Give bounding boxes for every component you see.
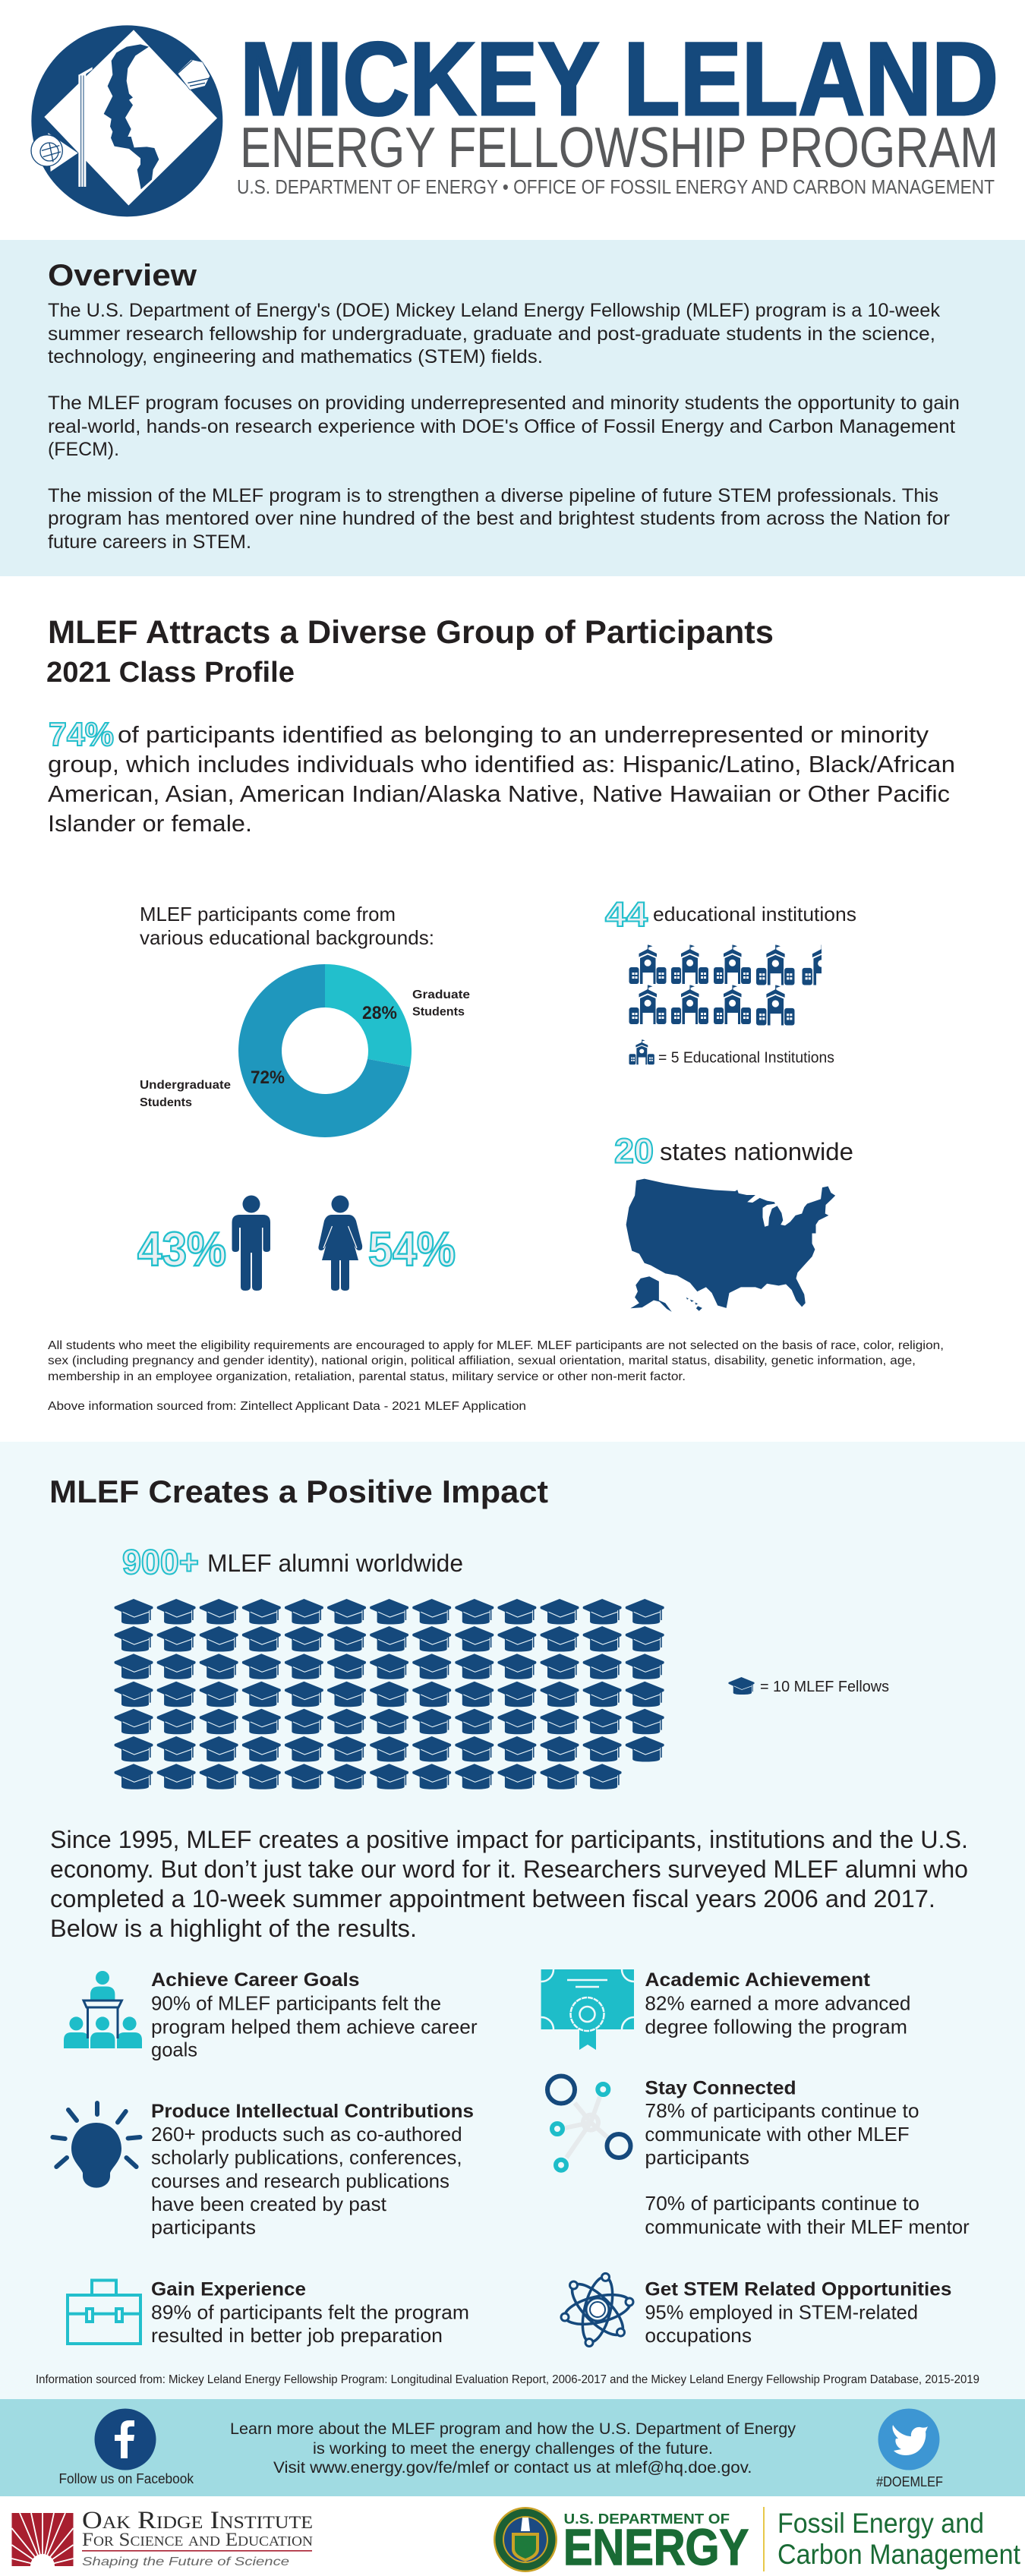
text: follow on Facebook: Follow us on Facebook <box>59 2471 194 2486</box>
item: gain experience: 89% of participants felt the program <box>151 2300 469 2323</box>
panel: overview <box>0 240 1025 576</box>
label: graduate students: Students <box>412 1005 465 1019</box>
item: achieve career goals: Achieve Career Goals <box>151 1969 360 1991</box>
icon: Twitter <box>878 2408 940 2470</box>
icon: briefcase <box>68 2281 140 2344</box>
text block: overview paragraphs <box>48 300 960 553</box>
item: gain experience: Gain Experience <box>151 2279 306 2300</box>
legend: school scale <box>629 1039 834 1066</box>
stat: 20 states: 20 <box>614 1131 654 1171</box>
icon: certificate <box>541 1969 634 2050</box>
stat: 43 percent men: 43% <box>137 1223 226 1276</box>
icon: light bulb <box>52 2103 140 2188</box>
item: achieve career goals <box>151 1969 478 2060</box>
text block: overview paragraphs: The MLEF program focuses on providing underrepresented and minority students the opportunity to gain <box>48 393 960 414</box>
text: states nationwide: states nationwide <box>660 1138 853 1165</box>
header <box>31 21 998 216</box>
text: tagline: Shaping the Future of Science <box>82 2556 289 2568</box>
heading: 2021 class profile: 2021 Class Profile <box>46 657 295 689</box>
item: intellectual contributions: 260+ products such as co-authored <box>151 2123 462 2146</box>
icon: presenter and audience <box>64 1971 142 2048</box>
text block: overview paragraphs: real-world, hands-on research experience with DOE's Office of Fossil Energy and Carbon Management <box>48 416 955 437</box>
heading: Overview: Overview <box>48 259 197 292</box>
item: stay connected: 70% of participants continue to <box>645 2192 919 2215</box>
icon: DOE seal <box>494 2507 557 2572</box>
item: stay connected: communicate with other MLEF <box>645 2123 910 2146</box>
text block: overview paragraphs: technology, engineering and mathematics (STEM) fields. <box>48 346 543 367</box>
item: academic achievement: 82% earned a more advanced <box>645 1992 910 2015</box>
text block: impact intro: Below is a highlight of the results. <box>50 1915 417 1942</box>
item: gain experience <box>151 2279 469 2347</box>
text block: overview paragraphs: program has mentored over nine hundred of the best and brightest students from across the Nation for <box>48 508 950 529</box>
item: intellectual contributions: have been created by past <box>151 2193 387 2215</box>
text: MLEF alumni worldwide: MLEF alumni worldwide <box>207 1550 463 1577</box>
text: educational institutions: educational institutions <box>653 903 856 925</box>
text block: impact intro <box>50 1826 968 1942</box>
text block: learn more: Visit www.energy.gov/fe/mlef or contact us at mlef@hq.doe.gov. <box>273 2459 752 2477</box>
item: intellectual contributions: Produce Intellectual Contributions <box>151 2101 474 2122</box>
panel: contact band <box>0 2399 1025 2496</box>
text block: eligibility statement: membership in an employee organization, retaliation, parental status, military service or other non-merit factor. <box>48 1370 686 1383</box>
label: graduate students: Graduate <box>412 988 470 1001</box>
stat: 900 plus: 900+ <box>122 1543 199 1581</box>
icon: Facebook <box>94 2408 156 2470</box>
chart: donut of student levels <box>140 964 470 1137</box>
text: hashtag: #DOEMLEF <box>876 2474 943 2489</box>
text: for science and education: For Science and Education <box>82 2530 313 2550</box>
item: STEM opportunities: Get STEM Related Opportunities <box>645 2279 951 2300</box>
text block: impact intro: economy. But don’t just take our word for it. Researchers surveyed MLEF alumni who <box>50 1856 968 1883</box>
item: STEM opportunities: occupations <box>645 2324 752 2347</box>
text: impact source note: Information sourced from: Mickey Leland Energy Fellowship Program: Longitudinal Evaluation Report, 2006-2017 and the Mickey Leland Energy Fellowship Program Database, 2015-2019 <box>36 2373 979 2386</box>
text block: underrepresented groups: group, which includes individuals who identified as: Hispanic/Latino, Black/African <box>48 751 955 777</box>
text block: overview paragraphs: The U.S. Department of Energy's (DOE) Mickey Leland Energy Fellowship (MLEF) program is a 10-week <box>48 300 940 321</box>
panel: positive impact <box>0 1442 1025 2399</box>
text block: eligibility statement <box>48 1339 944 1413</box>
map: United States <box>626 1179 835 1312</box>
stat: 54 percent women: 54% <box>368 1223 456 1276</box>
text: Energy: ENERGY <box>563 2519 749 2576</box>
icon: atom <box>561 2273 633 2346</box>
text block: learn more: is working to meet the energy challenges of the future. <box>313 2440 713 2458</box>
icon grid: schools <box>629 944 840 1026</box>
text block: overview paragraphs: (FECM). <box>48 439 119 460</box>
icon: woman <box>318 1195 362 1291</box>
logo: Oak Ridge Institute <box>12 2507 313 2568</box>
text: educational backgrounds intro: MLEF participants come from <box>140 903 396 925</box>
text: Fossil Energy and Carbon Management: Fossil Energy and <box>777 2508 984 2539</box>
icon: MLEF logo <box>31 25 222 216</box>
item: intellectual contributions: participants <box>151 2216 256 2239</box>
item: achieve career goals: program helped them achieve career <box>151 2015 478 2038</box>
text block: eligibility statement: All students who meet the eligibility requirements are encouraged to apply for MLEF. MLEF participants are not selected on the basis of race, color, religion, <box>48 1339 944 1352</box>
item: stay connected <box>645 2078 970 2238</box>
text block: impact intro: Since 1995, MLEF creates a positive impact for participants, institutions and the U.S. <box>50 1826 968 1853</box>
item: STEM opportunities <box>645 2279 951 2347</box>
legend: school scale: = 5 Educational Institutions <box>658 1049 834 1066</box>
item: STEM opportunities: 95% employed in STEM-related <box>645 2300 918 2323</box>
logo: Department of Energy <box>494 2507 1021 2576</box>
item: stay connected: communicate with their MLEF mentor <box>645 2215 970 2238</box>
text: educational backgrounds intro: various educational backgrounds: <box>140 926 434 949</box>
item: intellectual contributions: scholarly publications, conferences, <box>151 2146 462 2169</box>
panel: diverse group of participants <box>46 614 955 1413</box>
value: 72 percent: 72% <box>251 1067 285 1088</box>
item: stay connected: participants <box>645 2146 749 2169</box>
icon: ORISE sunburst <box>12 2513 73 2566</box>
item: academic achievement: Academic Achievement <box>645 1969 871 1991</box>
text block: underrepresented groups: of participants identified as belonging to an underrepresented or minority <box>118 721 929 748</box>
label: graduate students <box>412 988 470 1019</box>
text block: overview paragraphs: future careers in STEM. <box>48 531 251 553</box>
item: achieve career goals: goals <box>151 2038 197 2060</box>
value: 28 percent: 28% <box>362 1003 397 1023</box>
label: undergraduate students: Students <box>140 1096 192 1109</box>
text: Oak Ridge Institute: Oak Ridge Institute <box>82 2507 313 2534</box>
item: academic achievement <box>645 1969 910 2038</box>
text block: learn more: Learn more about the MLEF program and how the U.S. Department of Energy <box>230 2420 796 2438</box>
icon: man <box>232 1195 270 1291</box>
item: intellectual contributions: courses and research publications <box>151 2170 449 2193</box>
icon: network <box>547 2076 630 2171</box>
text block: underrepresented groups <box>48 721 955 837</box>
text block: eligibility statement: Above information sourced from: Zintellect Applicant Data - 2021 MLEF Application <box>48 1400 526 1413</box>
label: undergraduate students <box>140 1079 231 1109</box>
icon grid: graduation caps <box>114 1599 664 1789</box>
text: Fossil Energy and Carbon Management <box>777 2508 1021 2570</box>
text block: overview paragraphs: summer research fellowship for undergraduate, graduate and post-graduate students in the science, <box>48 323 935 345</box>
item: academic achievement: degree following the program <box>645 2015 907 2038</box>
item: gain experience: resulted in better job preparation <box>151 2324 443 2347</box>
text block: underrepresented groups: American, Asian, American Indian/Alaska Native, Native Hawaiian or Other Pacific <box>48 780 950 807</box>
heading: MLEF attracts a diverse group: MLEF Attracts a Diverse Group of Participants <box>48 614 774 651</box>
stat: 74 percent: 74% <box>49 716 114 753</box>
text block: impact intro: completed a 10-week summer appointment between fiscal years 2006 and 2017. <box>50 1885 935 1912</box>
text block: underrepresented groups: Islander or female. <box>48 810 252 837</box>
legend: cap scale: = 10 MLEF Fellows <box>760 1679 889 1695</box>
text block: overview paragraphs: The mission of the MLEF program is to strengthen a diverse pipeline of future STEM professionals. This <box>48 485 938 506</box>
label: undergraduate students: Undergraduate <box>140 1079 231 1092</box>
heading: MLEF creates a positive impact: MLEF Creates a Positive Impact <box>49 1474 548 1509</box>
item: intellectual contributions <box>151 2101 474 2239</box>
text block: learn more <box>230 2420 796 2477</box>
text: educational backgrounds intro <box>140 903 434 949</box>
item: stay connected: 78% of participants continue to <box>645 2099 919 2122</box>
text block: eligibility statement: sex (including pregnancy and gender identity), national origin, political affiliation, sexual orientation, marital status, disability, genetic information, age, <box>48 1354 916 1367</box>
item: stay connected: Stay Connected <box>645 2078 796 2099</box>
stat: 44 institutions: 44 <box>605 895 648 934</box>
item: achieve career goals: 90% of MLEF participants felt the <box>151 1992 441 2015</box>
text: U.S. Department of: U.S. DEPARTMENT OF <box>563 2511 730 2527</box>
